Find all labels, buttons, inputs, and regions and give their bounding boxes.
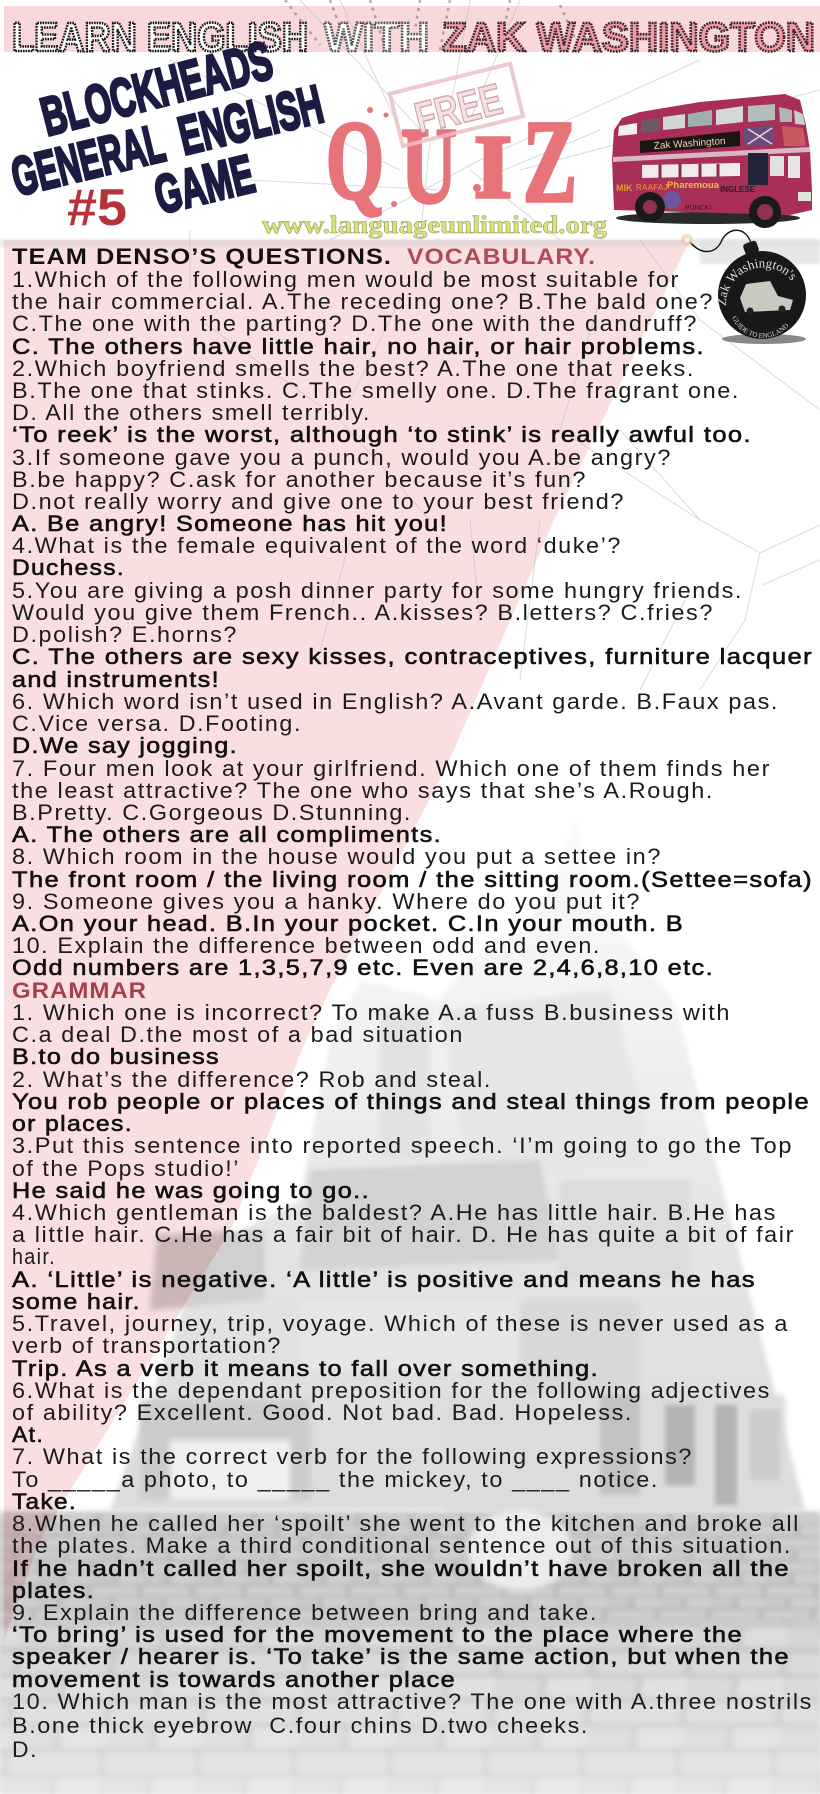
icon: pink double-decker bus: RAAFAJ [636,183,668,192]
section heading [12,244,596,269]
grammar question 4: a little hair. C.He has a fair bit of hair. D. He has quite a bit of fair [12,1222,795,1247]
question 3: B.be happy? C.ask for another because it’s fun? [12,467,587,492]
question 4: 4.What is the female equivalent of the word ‘duke’? [12,533,622,558]
grammar question 9: 9. Explain the difference between bring and take. [12,1600,598,1625]
issue number: #5 [67,179,127,237]
grammar answer 4: some hair. [12,1289,141,1314]
grammar answer 9 [12,1622,790,1692]
grammar question 10 [12,1689,813,1738]
grammar answer 9: ‘To bring’ is used for the movement to the place where the [12,1622,743,1647]
section heading: TEAM DENSO’S QUESTIONS. [12,244,392,269]
grammar answer 6: At. [12,1422,44,1447]
grammar answer 9: movement is towards another place [12,1667,456,1692]
grammar question 4: 4.Which gentleman is the baldest? A.He has little hair. B.He has [12,1200,777,1225]
answer 9: A.On your head. B.In your pocket. C.In your mouth. B [12,911,684,936]
question 1 [12,267,714,336]
cracked glass lines [170,0,820,690]
title: ZAK WASHINGTON [442,14,815,60]
grammar question 8: the plates. Make a third conditional sentence out of this situation. [12,1533,792,1558]
grammar answer 4 [12,1267,756,1314]
grammar question 7: 7. What is the correct verb for the following expressions? [12,1444,693,1469]
icon: bomb with fuse: GUIDE TO ENGLAND [732,316,788,338]
answer 10: Odd numbers are 1,3,5,7,9 etc. Even are 2,4,6,8,10 etc. [12,955,714,980]
heading: Blockheads General English Game [6,30,329,226]
section heading: VOCABULARY. [407,244,596,269]
title [12,14,815,60]
grammar question 1: 1. Which one is incorrect? To make A.a fuss B.business with [12,1000,731,1025]
bottom fade [0,1640,820,1794]
quiz word: U [401,107,457,226]
grammar question 1 [12,1000,731,1047]
grammar answer 8: If he hadn’t called her spoilt, she wouldn’t have broken all the [12,1556,790,1581]
answer 5: C. The others are sexy kisses, contraceptives, furniture lacquer [12,644,813,669]
answer 6: D.We say jogging. [12,733,238,758]
question 7 [12,756,771,825]
heading: Blockheads General English Game: GENERAL [6,113,171,208]
question 2: D. All the others smell terribly. [12,400,371,425]
question 2 [12,356,740,425]
question 1: C.The one with the parting? D.The one with the dandruff? [12,311,698,336]
question 7: B.Pretty. C.Gorgeous D.Stunning. [12,800,412,825]
grammar question 7 [12,1444,693,1492]
section: vocabulary questions [12,244,813,980]
heading: Blockheads General English Game: ENGLISH [173,74,329,167]
grammar question 6: 6.What is the dependant preposition for the following adjectives [12,1378,771,1403]
grammar question 3 [12,1133,793,1181]
grey strip behind section start [0,239,820,247]
question 8: 8. Which room in the house would you put a settee in? [12,844,662,869]
grammar question 5: 5.Travel, journey, trip, voyage. Which of these is never used as a [12,1311,789,1336]
section: grammar questions [12,978,813,1762]
grammar answer 9: speaker / hearer is. ‘To take’ is the same action, but when the [12,1644,790,1669]
quiz word [326,96,577,227]
grammar question 8: 8.When he called her ‘spoilt’ she went to the kitchen and broke all [12,1511,800,1536]
icon: pink double-decker bus: INGLESE [720,185,756,194]
header pink band [4,6,820,52]
question 5: 5.You are giving a posh dinner party for some hungry friends. [12,578,743,603]
question 5: D.polish? E.horns? [12,622,238,647]
icon: pink double-decker bus: PUNCK! [685,205,712,212]
quiz word: I [474,118,512,217]
icon: pink double-decker bus: Pharemoua [667,180,720,190]
grammar answer 2: You rob people or places of things and steal things from people [12,1089,810,1114]
grammar question 6 [12,1378,771,1425]
answer 7: A. The others are all compliments. [12,822,442,847]
question 6 [12,689,779,736]
grammar heading: GRAMMAR [12,978,147,1003]
grammar answer 8 [12,1556,790,1603]
website url: www.languageunlimited.org [262,212,608,239]
grammar answer 4: A. ‘Little’ is negative. ‘A little’ is positive and means he has [12,1267,756,1292]
question 5 [12,578,743,647]
grammar answer 7: Take. [12,1489,77,1514]
question 3: D.not really worry and give one to your best friend? [12,489,625,514]
grammar answer 1: B.to do business [12,1044,220,1069]
icon: pink double-decker bus [612,94,812,228]
quiz word: Z [523,96,577,227]
grammar question 2: 2. What’s the difference? Rob and steal. [12,1067,492,1092]
question 7: the least attractive? The one who says that she’s A.Rough. [12,778,714,803]
grammar answer 2 [12,1089,810,1136]
grammar question 5 [12,1311,789,1358]
question 9: 9. Someone gives you a hanky. Where do you put it? [12,889,641,914]
grammar question 6: of ability? Excellent. Good. Not bad. Bad. Hopeless. [12,1400,633,1425]
icon: bomb with fuse: Zak Washington's [717,259,796,306]
question 1: the hair commercial. A.The receding one? B.The bald one? [12,289,714,314]
answer 5: and instruments! [12,667,220,692]
question 2: 2.Which boyfriend smells the best? A.The one that reeks. [12,356,695,381]
grammar question 4: hair. [12,1244,56,1269]
grammar question 3: of the Pops studio!’ [12,1156,240,1181]
grammar question 4 [12,1200,795,1269]
icon: bomb with fuse [681,230,806,344]
title: WITH [324,14,429,60]
free stamp: FREE [410,75,507,143]
heading: Blockheads General English Game: GAME [149,144,260,226]
grey photo background: tower and street [0,815,820,1794]
grammar question 3: 3.Put this sentence into reported speech. ‘I’m going to go the Top [12,1133,793,1158]
grammar question 1: C.a deal D.the most of a bad situation [12,1022,464,1047]
grammar question 10: 10. Which man is the most attractive? The one with A.three nostrils [12,1689,813,1714]
grammar question 7: To _____a photo, to _____ the mickey, to ____ notice. [12,1467,659,1492]
dark scratches at top [285,0,580,50]
question 10: 10. Explain the difference between odd and even. [12,933,601,958]
question 3 [12,445,672,514]
answer 3: A. Be angry! Someone has hit you! [12,511,448,536]
grammar question 5: verb of transportation? [12,1333,282,1358]
question 7: 7. Four men look at your girlfriend. Which one of them finds her [12,756,771,781]
grammar answer 2: or places. [12,1111,133,1136]
icon: pink double-decker bus: MIK [616,183,633,193]
quiz word: Q [326,99,384,223]
answer 2: ‘To reek’ is the worst, although ‘to stink’ is really awful too. [12,422,752,447]
question 5: Would you give them French.. A.kisses? B.letters? C.fries? [12,600,714,625]
answer 5 [12,644,813,692]
grammar answer 3: He said he was going to go.. [12,1178,370,1203]
answer 4: Duchess. [12,555,125,580]
grammar answer 10: D. [12,1737,38,1762]
title: LEARN ENGLISH [12,14,308,60]
grammar question 10: B.one thick eyebrow C.four chins D.two cheeks. [12,1713,589,1738]
pink diagonal background panel [4,240,690,1640]
grammar question 8 [12,1511,800,1558]
answer 1: C. The others have little hair, no hair, or hair problems. [12,334,705,359]
grammar answer 8: plates. [12,1578,95,1603]
grammar answer 5: Trip. As a verb it means to fall over something. [12,1356,599,1381]
question 2: B.The one that stinks. C.The smelly one. D.The fragrant one. [12,378,740,403]
question 1: 1.Which of the following men would be most suitable for [12,267,680,292]
question 6: 6. Which word isn’t used in English? A.Avant garde. B.Faux pas. [12,689,779,714]
question 6: C.Vice versa. D.Footing. [12,711,302,736]
answer 8: The front room / the living room / the sitting room.(Settee=sofa) [12,867,813,892]
question 3: 3.If someone gave you a punch, would you A.be angry? [12,445,672,470]
icon: pink double-decker bus: Zak Washington [653,136,726,152]
